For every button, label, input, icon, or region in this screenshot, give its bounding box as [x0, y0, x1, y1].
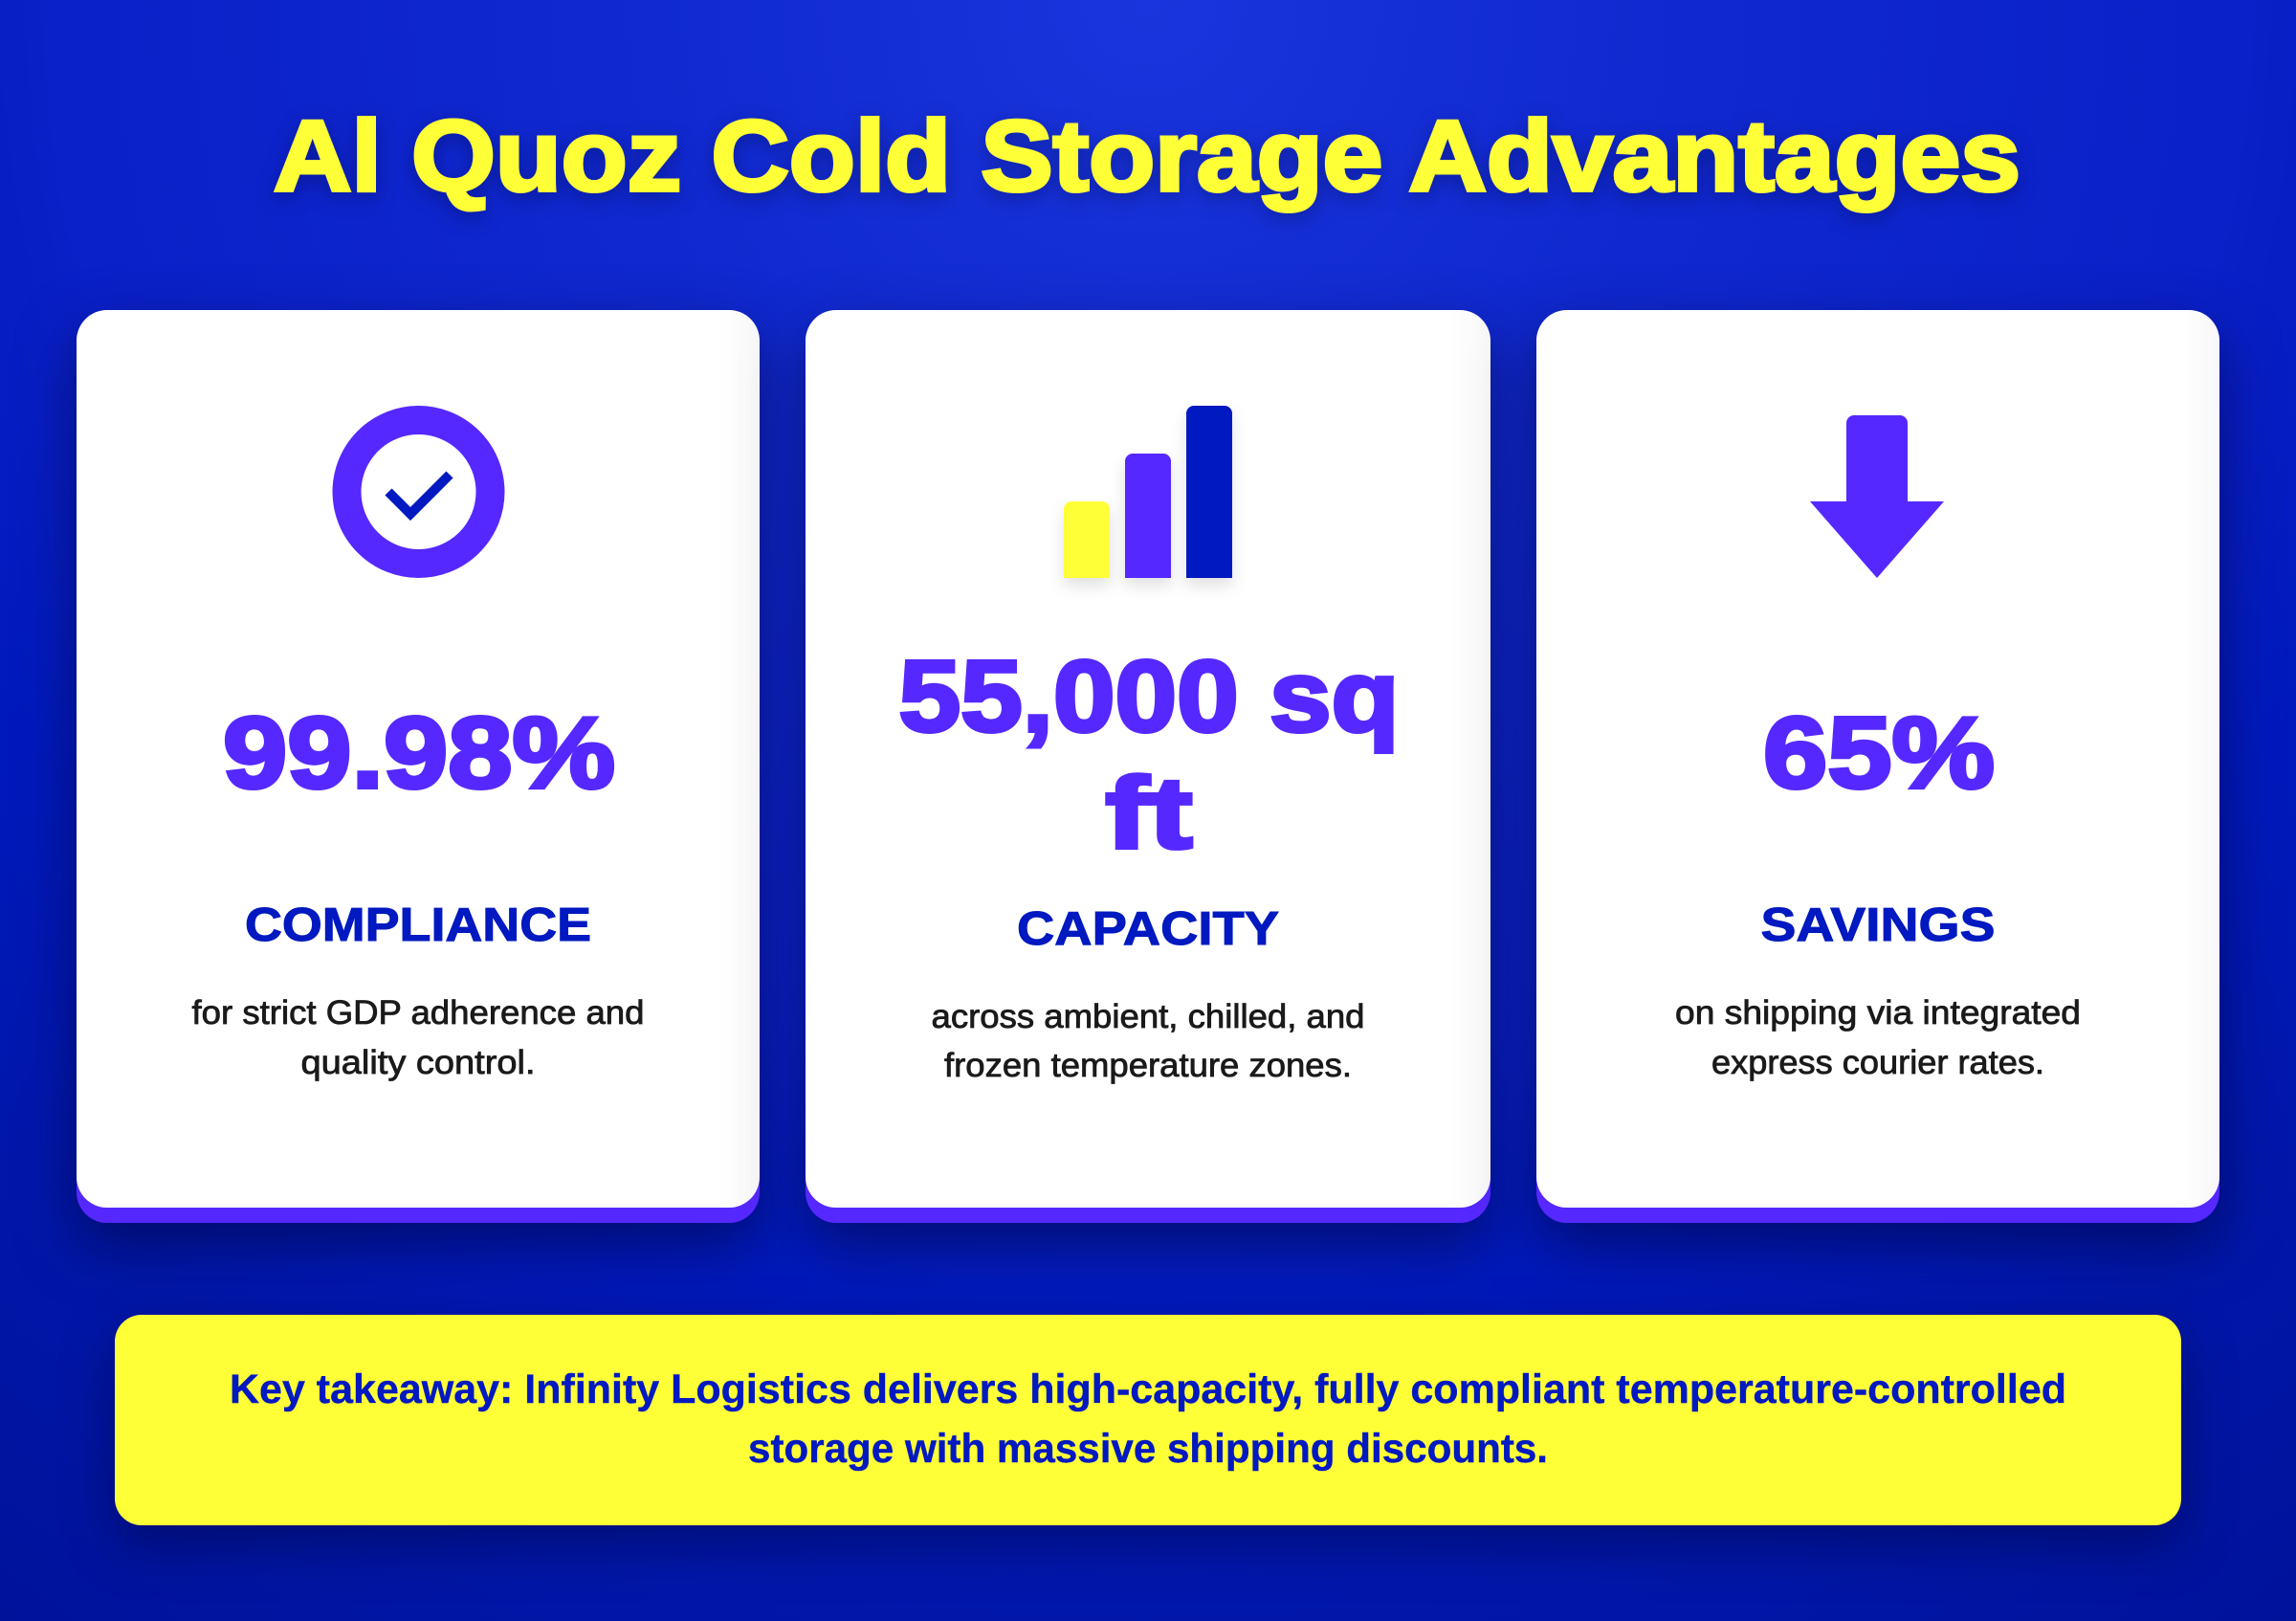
- stat: 99.98%: 99.98%: [223, 697, 615, 810]
- icon: bar chart: [1064, 406, 1232, 578]
- description: [1675, 994, 2081, 1081]
- stat: 55,000 sq ft: ft: [1106, 757, 1192, 870]
- callout: key takeaway: storage with massive shipping discounts.: [748, 1426, 1548, 1472]
- description: across ambient, chilled, and: [932, 998, 1364, 1035]
- panel: compliance: [77, 310, 760, 1223]
- callout: key takeaway: [115, 1315, 2181, 1525]
- description: frozen temperature zones.: [944, 1047, 1352, 1084]
- label: savings: SAVINGS: [1760, 899, 1996, 951]
- icon: check circle: [346, 420, 490, 564]
- label: capacity: CAPACITY: [1017, 903, 1279, 955]
- title: Al Quoz Cold Storage Advantages: [274, 100, 2020, 212]
- icon: down arrow: [1810, 415, 1944, 578]
- description: for strict GDP adherence and: [191, 994, 645, 1032]
- stat: 55,000 sq ft: [899, 640, 1399, 870]
- stat: 55,000 sq ft: 55,000 sq: [899, 640, 1399, 753]
- panel: capacity: [806, 310, 1490, 1223]
- panel: savings: [1536, 310, 2219, 1223]
- description: on shipping via integrated: [1675, 994, 2081, 1032]
- stat: 65%: 65%: [1763, 697, 1995, 810]
- description: express courier rates.: [1711, 1044, 2044, 1081]
- label: compliance: COMPLIANCE: [245, 899, 591, 951]
- description: [191, 994, 645, 1081]
- description: quality control.: [300, 1044, 536, 1081]
- callout: key takeaway: Key takeaway: Infinity Logistics delivers high-capacity, fully compliant temperature-controlled: [230, 1366, 2066, 1412]
- description: [932, 998, 1364, 1084]
